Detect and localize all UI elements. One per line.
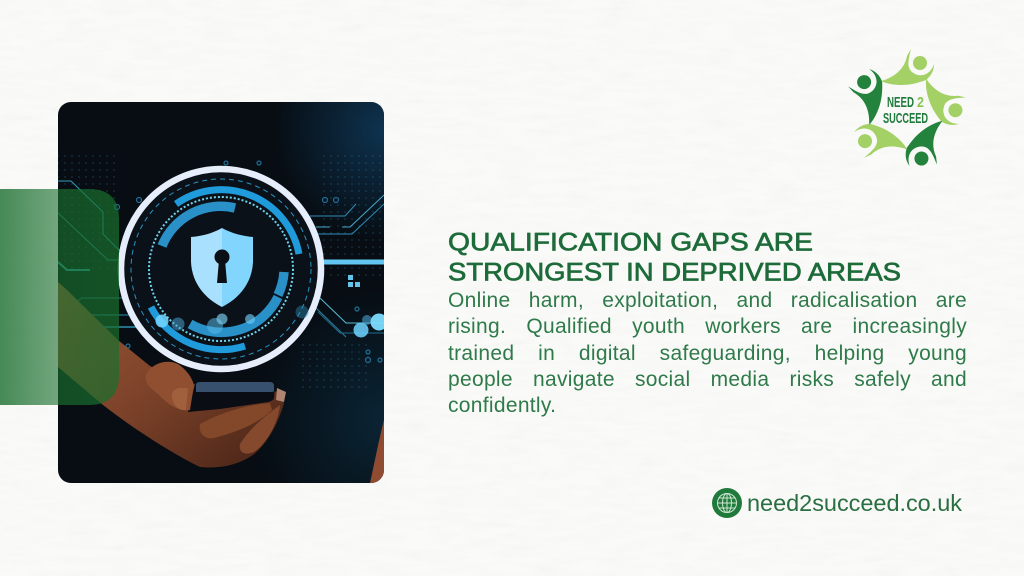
lower inner arc: [190, 297, 278, 332]
right arc: [278, 272, 284, 295]
arm and palm: [58, 282, 284, 468]
security ring: [121, 169, 321, 369]
inner arc top: [162, 206, 235, 246]
body text: people navigate social media risks safely and: [448, 368, 967, 390]
phone: [188, 381, 275, 412]
dotted grid texture: [58, 150, 384, 390]
heading: [448, 228, 901, 286]
circuit lines: [58, 181, 384, 341]
pixel squares: [348, 275, 360, 287]
heading: STRONGEST IN DEPRIVED AREAS: [448, 258, 901, 286]
logo: Need 2 Succeed: 2: [917, 94, 924, 111]
body text: Online harm, exploitation, and radicalisation are: [448, 289, 967, 312]
green overlay panel: [0, 189, 119, 405]
fingers and thumb: [146, 362, 384, 483]
photo: hand holding phone with digital security shield: [58, 102, 388, 483]
outer arc top: [176, 190, 299, 254]
logo: Need 2 Succeed: SUCCEED: [883, 110, 928, 127]
body text: [448, 289, 967, 417]
shield with keyhole: [191, 228, 253, 307]
bokeh lights: [156, 306, 388, 338]
body text: confidently.: [448, 394, 556, 417]
heading: QUALIFICATION GAPS ARE: [448, 228, 813, 256]
lower outer arc: [151, 307, 245, 350]
logo: Need 2 Succeed: NEED: [887, 94, 914, 111]
logo: Need 2 Succeed: [839, 49, 973, 178]
body text: trained in digital safeguarding, helping young: [448, 342, 967, 364]
website link with globe icon: need2succeed.co.uk: [747, 490, 962, 516]
circuit nodes: [114, 160, 383, 364]
body text: rising. Qualified youth workers are increasingly: [448, 315, 967, 338]
